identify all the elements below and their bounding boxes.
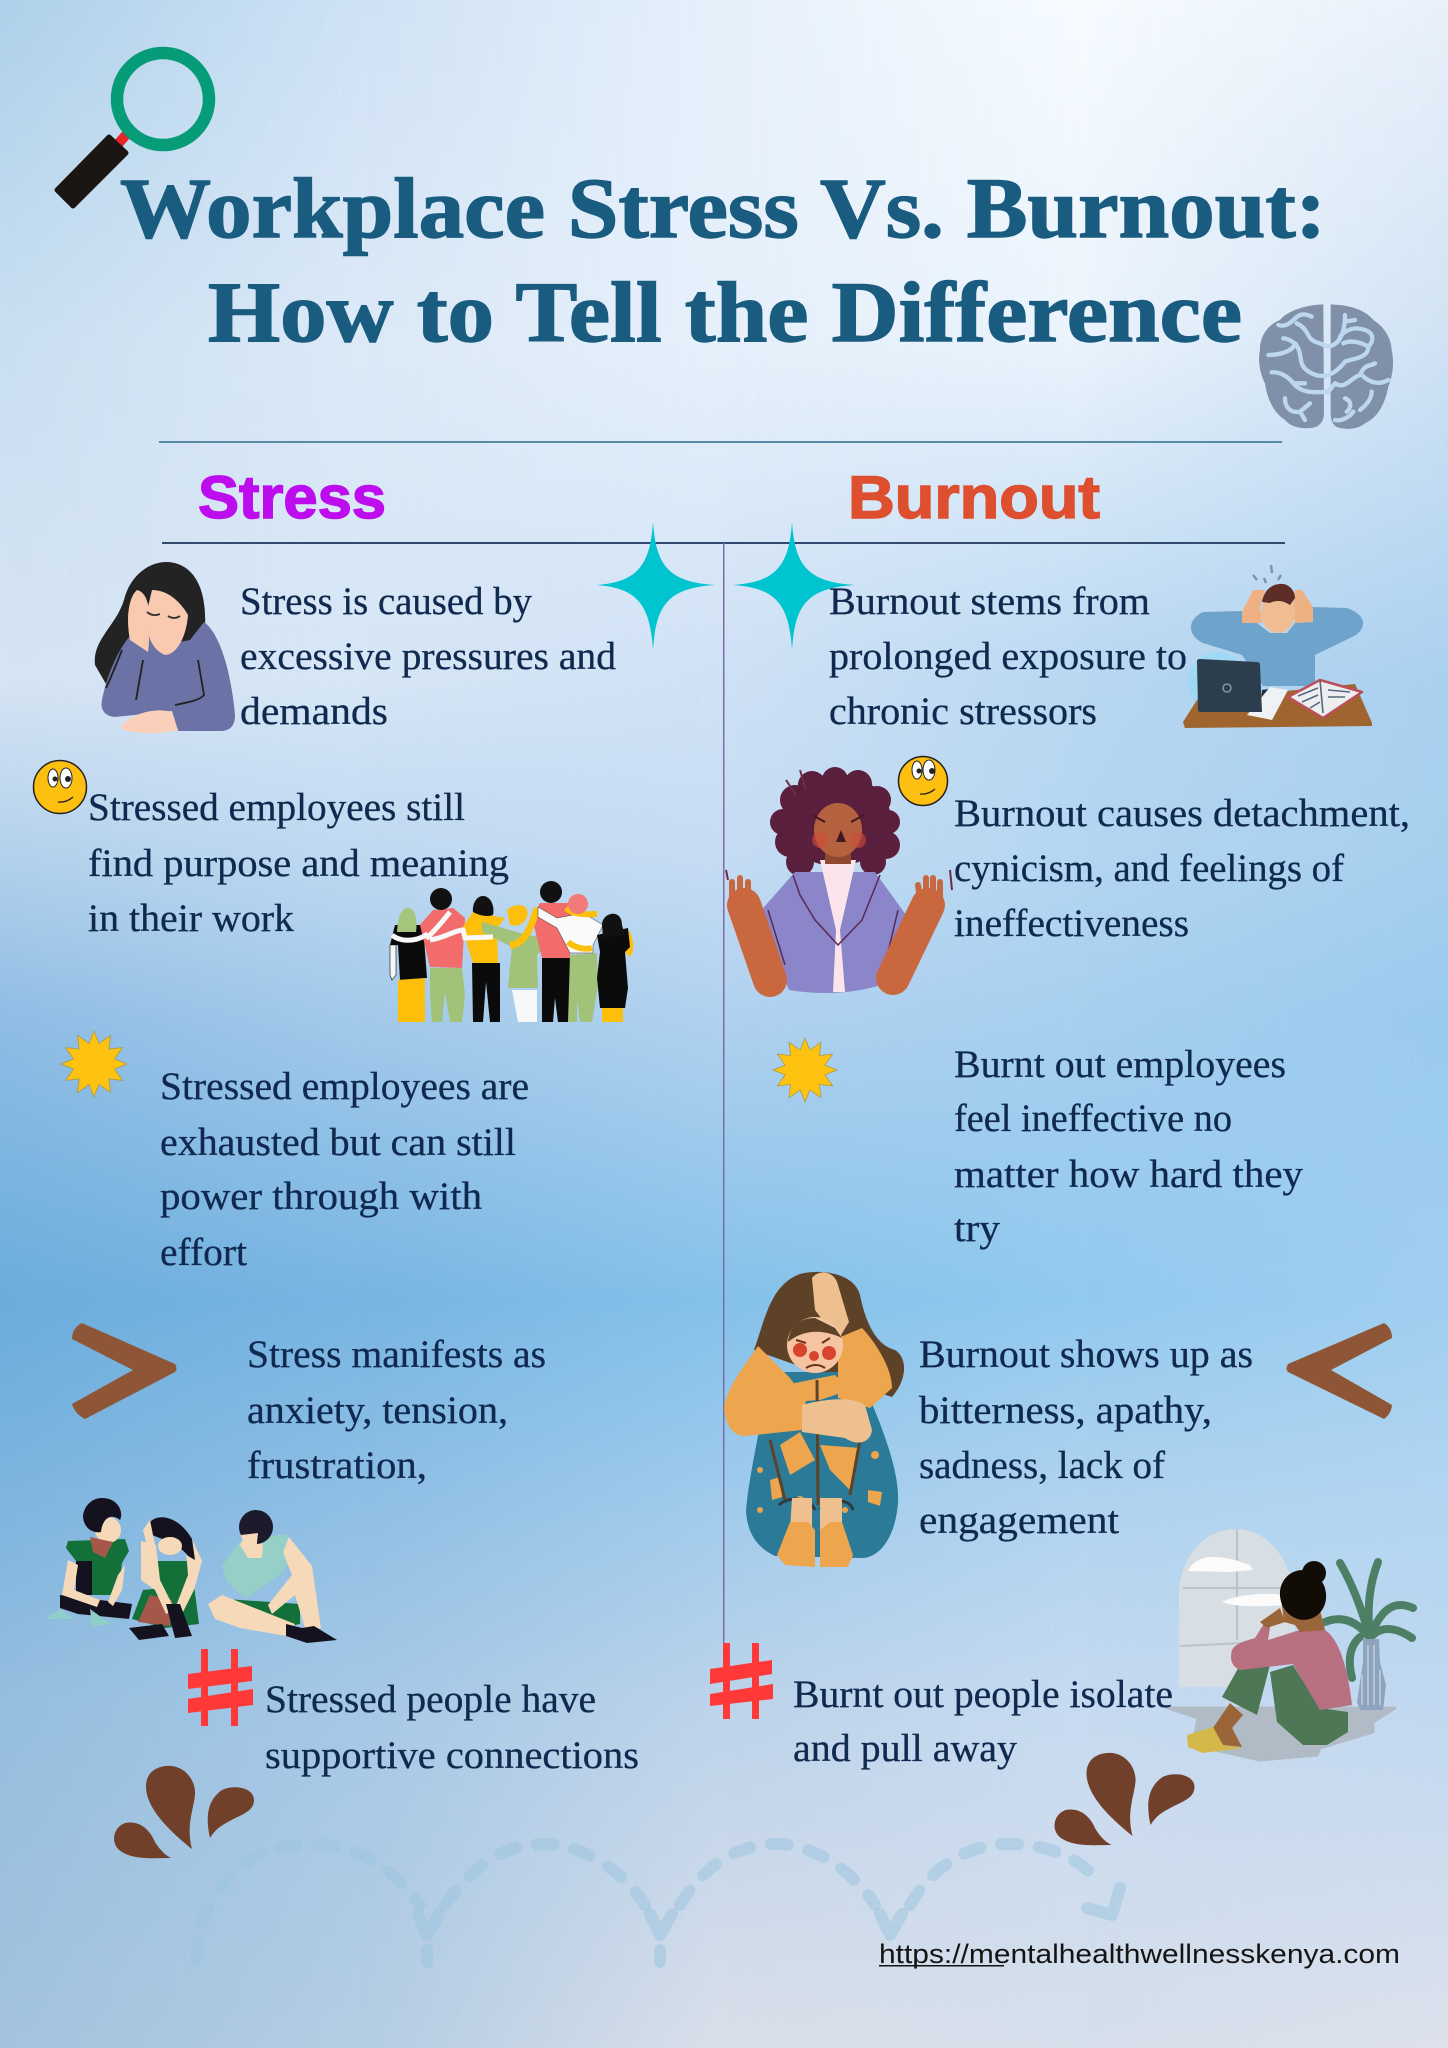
icon: red hash right xyxy=(710,1643,773,1719)
divider rule: under headings xyxy=(162,542,1285,544)
text: stressed connections xyxy=(265,1678,639,1777)
text: burnout detachment: cynicism, and feelings of xyxy=(954,847,1344,890)
icon: magnifying glass xyxy=(57,53,209,206)
website url: https://mentalhealthwellnesskenya.com xyxy=(879,1939,1400,1969)
icon: cyan sparkle left xyxy=(596,522,715,650)
icon: yellow burst right xyxy=(773,1038,837,1102)
text: burnout ineffective: try xyxy=(954,1207,1001,1250)
text: burnout cause: prolonged exposure to xyxy=(829,635,1187,678)
divider rule: top xyxy=(159,441,1282,443)
text: burnout manifests xyxy=(919,1333,1253,1542)
text: stress purpose xyxy=(88,786,509,940)
text: burnout isolation: Burnt out people isolate xyxy=(793,1673,1173,1716)
text: burnout isolation: and pull away xyxy=(793,1727,1018,1770)
text: stress purpose: Stressed employees still xyxy=(88,786,465,829)
illustration: group of friends hugging xyxy=(390,881,633,1022)
vertical centre divider xyxy=(723,543,724,1645)
text: stress exhaustion: power through with xyxy=(160,1175,482,1218)
icon: brown drops right xyxy=(1055,1753,1194,1845)
text: burnout detachment: ineffectiveness xyxy=(954,902,1189,945)
illustration: stressed woman with hand on head xyxy=(95,562,235,733)
illustration: woman by window with plant xyxy=(1168,1529,1413,1760)
text: stress cause xyxy=(240,580,616,733)
text: stress cause: demands xyxy=(240,690,388,733)
text: stress exhaustion: effort xyxy=(160,1231,247,1274)
text: stress exhaustion: Stressed employees are xyxy=(160,1065,529,1108)
text: stressed connections: supportive connections xyxy=(265,1734,639,1777)
text: stress purpose: in their work xyxy=(88,897,294,940)
text: burnout manifests: sadness, lack of xyxy=(919,1444,1165,1487)
text: stress cause: excessive pressures and xyxy=(240,635,616,678)
illustration: man at desk with laptop and book xyxy=(1183,565,1372,728)
text: burnout cause: chronic stressors xyxy=(829,690,1097,733)
text: burnout manifests: engagement xyxy=(919,1499,1119,1542)
text: burnout detachment: Burnout causes detachment, xyxy=(954,792,1410,835)
text: burnout manifests: Burnout shows up as xyxy=(919,1333,1253,1376)
text: burnout cause: Burnout stems from xyxy=(829,580,1150,623)
icon: less-than sign xyxy=(1286,1323,1392,1419)
icon: cyan sparkle right xyxy=(733,522,855,650)
icon: brown drops left xyxy=(114,1766,254,1858)
text: stress manifests: Stress manifests as xyxy=(247,1333,546,1376)
text: burnout cause xyxy=(829,580,1187,733)
text: burnout manifests: bitterness, apathy, xyxy=(919,1389,1212,1432)
decorative dashed arrows along the bottom xyxy=(196,1844,1120,1962)
text: burnout ineffective: matter how hard they xyxy=(954,1153,1304,1196)
illustration: frustrated woman with curly hair xyxy=(726,767,952,993)
text: burnout ineffective: feel ineffective no xyxy=(954,1097,1232,1140)
title: How to Tell the Difference xyxy=(208,264,1242,360)
text: burnout ineffective xyxy=(954,1043,1304,1250)
heading: Stress: Stress xyxy=(198,464,386,531)
text: burnout ineffective: Burnt out employees xyxy=(954,1043,1286,1086)
icon: yellow burst left xyxy=(61,1031,127,1097)
text: burnout detachment xyxy=(954,792,1410,945)
text: stress exhaustion xyxy=(160,1065,529,1274)
icon: greater-than sign xyxy=(72,1323,176,1419)
text: stress cause: Stress is caused by xyxy=(240,580,532,623)
title xyxy=(120,160,1326,360)
text: stress purpose: find purpose and meaning xyxy=(88,842,509,885)
text: stress exhaustion: exhausted but can still xyxy=(160,1121,516,1164)
heading: Burnout: Burnout xyxy=(848,464,1100,531)
text: stress manifests: anxiety, tension, xyxy=(247,1389,508,1432)
text: stress manifests: frustration, xyxy=(247,1444,427,1487)
icon: smiley left xyxy=(34,760,86,814)
text: burnout isolation xyxy=(793,1673,1173,1770)
icon: red hash left xyxy=(188,1649,253,1726)
text: stress manifests xyxy=(247,1333,546,1487)
icon: smiley right xyxy=(898,756,948,806)
illustration: three people sitting on floor xyxy=(46,1498,337,1643)
title: Workplace Stress Vs. Burnout: xyxy=(120,160,1326,256)
illustration: woman hugging knees xyxy=(724,1272,904,1567)
icon: brain xyxy=(1259,304,1393,429)
text: stressed connections: Stressed people have xyxy=(265,1678,596,1721)
